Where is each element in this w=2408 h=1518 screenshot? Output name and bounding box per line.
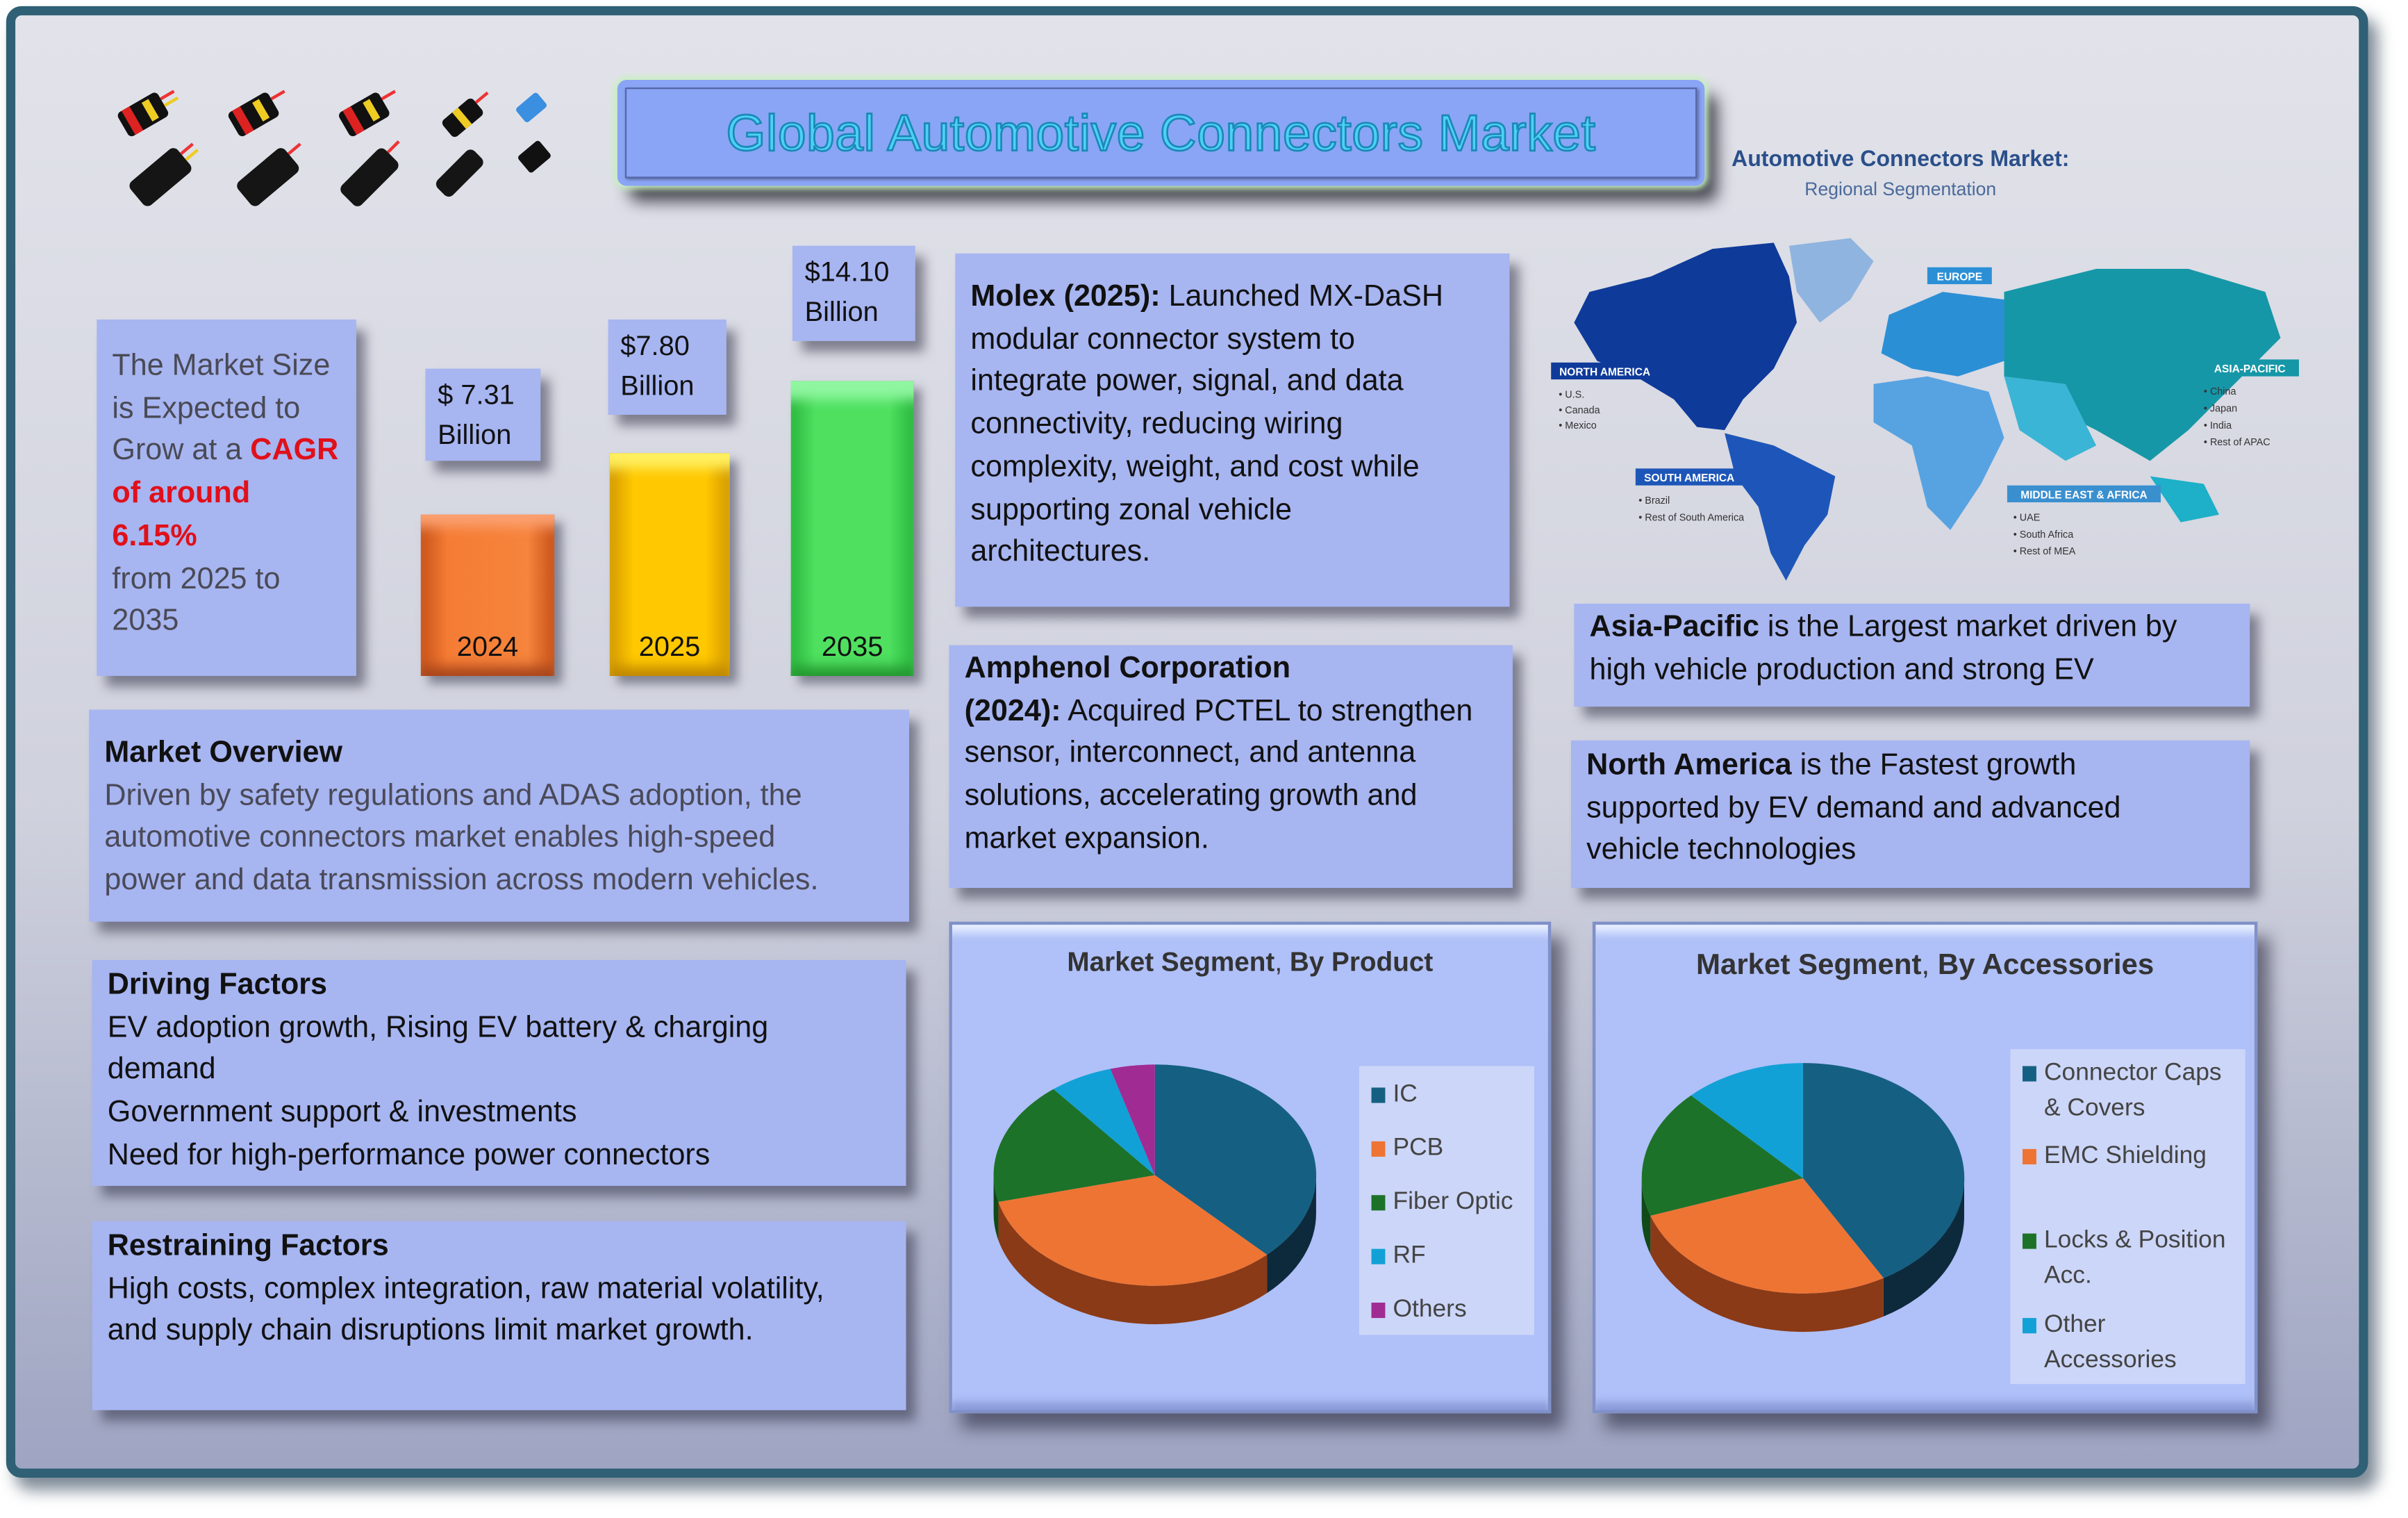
panel: pie by accessories <box>1593 922 2257 1413</box>
text block: CAGR: is Expected to <box>112 391 300 425</box>
bar 2024: 2024 <box>457 632 518 662</box>
panel: driving factors: EV adoption growth, Rising EV battery & charging <box>108 1010 768 1044</box>
label: 2025 value: $7.80 <box>620 330 690 361</box>
text block: Molex: architectures. <box>970 535 1150 569</box>
title <box>617 80 1704 186</box>
panel: restraining factors <box>92 1221 906 1410</box>
bar 2035 <box>791 381 914 676</box>
text block: Molex: Molex (2025): Launched MX-DaSH <box>970 279 1443 313</box>
map: • Rest of South America <box>1638 513 1744 524</box>
label: 2035 value: Billion <box>805 297 879 327</box>
panel: driving factors <box>92 960 906 1186</box>
label: 2024 value: Billion <box>438 420 511 450</box>
legend: PCB <box>1393 1135 1443 1162</box>
text block: North America: supported by EV demand and advanced <box>1586 791 2121 825</box>
bar 2024 <box>421 515 554 676</box>
map: • Mexico <box>1559 420 1597 431</box>
map: • India <box>2204 420 2232 431</box>
panel: market overview: Driven by safety regulations and ADAS adoption, the <box>104 778 802 812</box>
chart title: Market Segment, By Product <box>1067 946 1433 977</box>
legend: Others <box>1393 1296 1467 1323</box>
legend: EMC Shielding <box>2044 1143 2207 1169</box>
text block: Amphenol: solutions, accelerating growth and <box>965 779 1417 813</box>
text block: Amphenol: sensor, interconnect, and antenna <box>965 736 1415 770</box>
chart title: Market Segment, By Accessories <box>1696 949 2154 982</box>
panel: driving factors: demand <box>108 1053 216 1087</box>
map: EUROPE <box>1937 272 1982 283</box>
map: MIDDLE EAST & AFRICA <box>2020 490 2148 502</box>
legend <box>1359 1066 1534 1335</box>
bar 2025: 2025 <box>639 632 700 662</box>
text block: Amphenol <box>949 645 1513 888</box>
panel: pie by product <box>949 922 1551 1413</box>
text block: Asia-Pacific: Asia-Pacific is the Largest market driven by <box>1589 610 2177 643</box>
panel: driving factors: Government support & investments <box>108 1096 577 1129</box>
label: 2035 value: $14.10 <box>805 256 889 287</box>
legend: Acc. <box>2044 1263 2092 1289</box>
text block: Molex: complexity, weight, and cost while <box>970 449 1420 484</box>
text block: Amphenol: (2024): Acquired PCTEL to strengthen <box>965 694 1472 727</box>
label: 2035 value <box>792 246 915 341</box>
text block: Molex: supporting zonal vehicle <box>970 493 1292 526</box>
text block: Molex: modular connector system to <box>970 322 1355 356</box>
map: • Rest of APAC <box>2204 437 2270 448</box>
pie chart <box>993 1064 1317 1324</box>
map <box>1551 238 2299 581</box>
legend: Fiber Optic <box>1393 1189 1513 1215</box>
bar chart <box>421 246 932 690</box>
text block: Molex <box>955 254 1510 607</box>
text block: CAGR: from 2025 to <box>112 561 280 595</box>
map: • Brazil <box>1638 495 1670 506</box>
panel: market overview: automotive connectors market enables high-speed <box>104 821 775 855</box>
label: 2025 value: Billion <box>620 370 694 401</box>
map title: Automotive Connectors Market: <box>1732 147 2069 172</box>
text block: Asia-Pacific <box>1574 604 2250 707</box>
text block: North America <box>1571 741 2250 888</box>
bar 2025 <box>610 453 729 676</box>
legend: RF <box>1393 1243 1426 1269</box>
legend: Locks & Position <box>2044 1228 2226 1253</box>
legend: IC <box>1393 1082 1418 1107</box>
panel: restraining factors: High costs, complex integration, raw material volatility, <box>108 1271 824 1305</box>
legend <box>2010 1049 2245 1384</box>
panel: driving factors: Driving Factors <box>108 968 327 1002</box>
map: • Japan <box>2204 404 2237 415</box>
map: ASIA-PACIFIC <box>2214 363 2286 375</box>
text block: Molex: connectivity, reducing wiring <box>970 407 1343 441</box>
panel: restraining factors: and supply chain disruptions limit market growth. <box>108 1314 754 1348</box>
label: 2025 value <box>608 320 726 415</box>
text block: Amphenol: market expansion. <box>965 822 1209 855</box>
text block: Asia-Pacific: high vehicle production and strong EV <box>1589 652 2094 686</box>
text block: CAGR <box>97 320 356 676</box>
legend: & Covers <box>2044 1096 2145 1121</box>
text block: Amphenol: Amphenol Corporation <box>965 652 1290 685</box>
text block: North America: North America is the Fastest growth <box>1586 748 2076 782</box>
title: Global Automotive Connectors Market <box>726 104 1596 161</box>
map: • Rest of MEA <box>2013 546 2076 557</box>
legend: Connector Caps <box>2044 1060 2222 1086</box>
text block: CAGR: Grow at a CAGR <box>112 434 338 468</box>
label: 2024 value <box>425 369 540 461</box>
legend: Accessories <box>2044 1347 2177 1373</box>
map: • UAE <box>2013 513 2040 524</box>
map: • U.S. <box>1559 390 1584 401</box>
text block: CAGR: 6.15% <box>112 519 197 553</box>
legend: Other <box>2044 1312 2105 1338</box>
panel: restraining factors: Restraining Factors <box>108 1229 389 1263</box>
map title <box>1732 147 2069 199</box>
map: • South Africa <box>2013 529 2073 541</box>
icon: connectors <box>118 90 551 206</box>
map: • China <box>2204 386 2236 397</box>
map: NORTH AMERICA <box>1559 367 1650 379</box>
map: • Canada <box>1559 405 1600 416</box>
text block: Molex: integrate power, signal, and data <box>970 365 1404 399</box>
text block: CAGR: The Market Size <box>112 349 330 383</box>
map title: Regional Segmentation <box>1804 178 1996 199</box>
panel: market overview: Market Overview <box>104 736 342 770</box>
label: 2024 value: $ 7.31 <box>438 379 515 410</box>
text block: CAGR: 2035 <box>112 604 178 638</box>
text block: North America: vehicle technologies <box>1586 833 1856 867</box>
map: SOUTH AMERICA <box>1644 472 1734 484</box>
bar 2035: 2035 <box>822 632 883 662</box>
panel: market overview: power and data transmission across modern vehicles. <box>104 864 818 898</box>
text block: CAGR: of around <box>112 477 250 510</box>
panel: market overview <box>89 710 909 922</box>
panel: driving factors: Need for high-performance power connectors <box>108 1138 710 1172</box>
